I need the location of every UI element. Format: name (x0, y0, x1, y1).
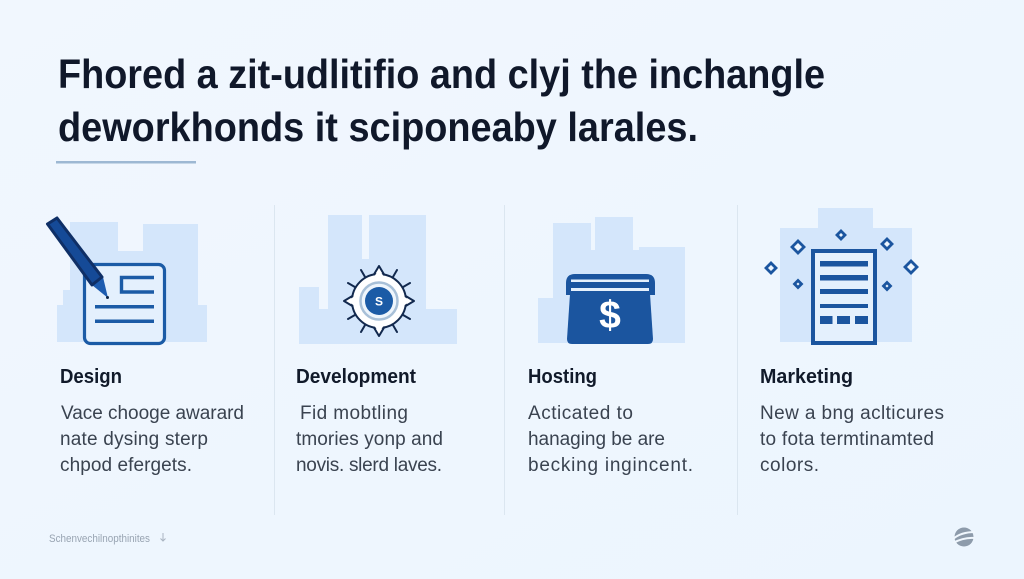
text: development description (296, 403, 443, 476)
panel: marketing (760, 208, 944, 476)
text: development description: Fid mobtling (300, 403, 408, 424)
panel: design (48, 218, 244, 476)
icon: money box: $ (599, 294, 621, 337)
title (58, 51, 825, 150)
footer note: Schenvechilnopthinites (49, 533, 150, 545)
text: hosting description (528, 403, 693, 476)
heading: hosting: Hosting (528, 366, 597, 388)
icon: down arrow (160, 533, 166, 541)
text: design description: nate dysing sterp (60, 429, 208, 450)
icon: money box (538, 217, 685, 344)
text: marketing description: to fota termtinamted (760, 429, 934, 450)
heading: development: Development (296, 366, 416, 388)
text: marketing description: New a bng aclticures (760, 403, 944, 424)
text: design description: chpod efergets. (60, 455, 192, 476)
title: deworkhonds it sciponeaby larales. (58, 104, 698, 150)
text: hosting description: Acticated to (528, 403, 633, 424)
panel: hosting (528, 217, 693, 476)
icon: pen and document (48, 218, 207, 344)
icon: document with diamonds (766, 208, 917, 343)
icon: gear with coin: S (375, 294, 383, 308)
text: development description: tmories yonp and (296, 429, 443, 450)
text: design description (60, 403, 244, 476)
text: hosting description: hanaging be are (528, 429, 665, 450)
text: marketing description: colors. (760, 455, 819, 476)
icon: footer logo (953, 528, 975, 546)
heading: marketing: Marketing (760, 366, 853, 388)
text: marketing description (760, 403, 944, 476)
text: hosting description: becking ingincent. (528, 455, 693, 476)
icon: gear with coin (299, 215, 457, 344)
title: Fhored a zit-udlitifio and clyj the inchangle (58, 51, 825, 97)
text: design description: Vace chooge awarard (61, 403, 244, 424)
panel: development (296, 215, 457, 476)
heading: design: Design (60, 366, 122, 388)
text: development description: novis. slerd laves. (296, 455, 442, 476)
